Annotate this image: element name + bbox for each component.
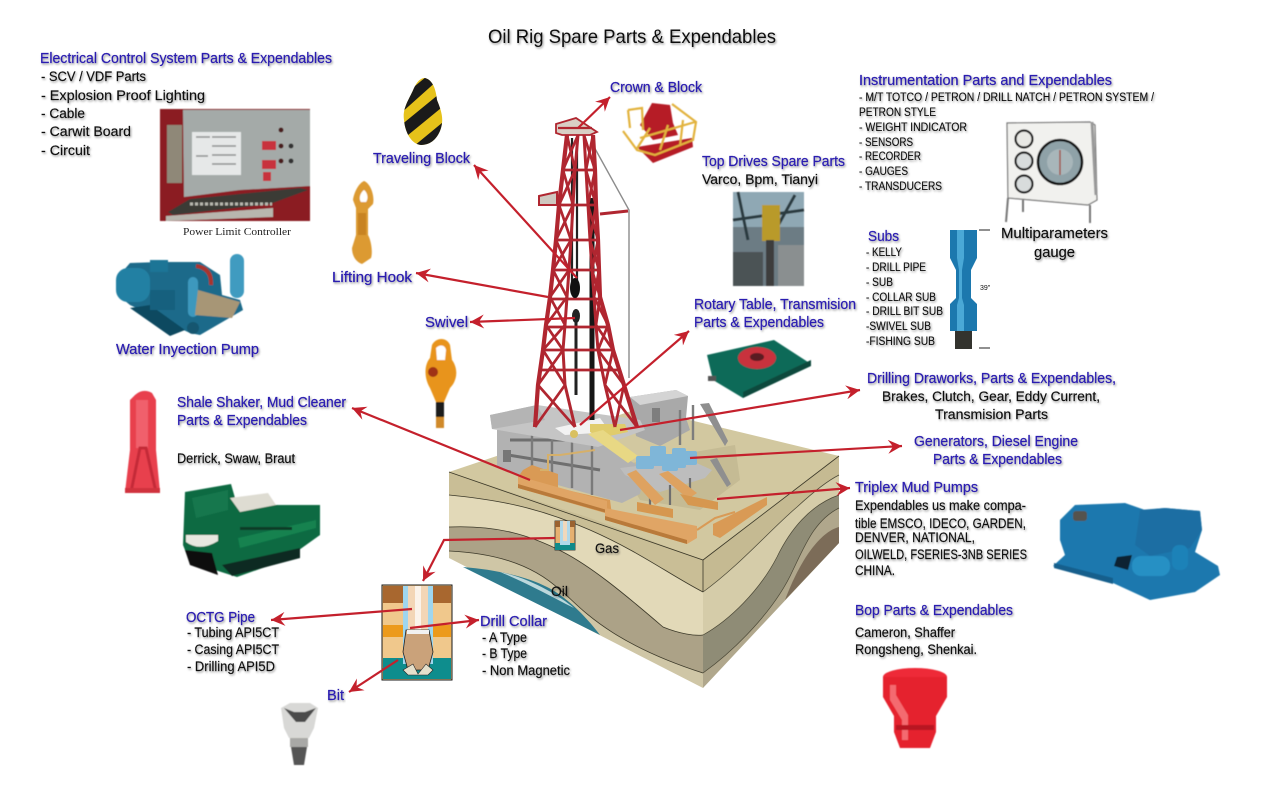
stairs xyxy=(597,403,731,487)
arrow: shale shaker xyxy=(352,408,530,480)
arrow: traveling block xyxy=(474,165,577,278)
crown cap xyxy=(556,118,597,135)
panel: electrical control system xyxy=(40,51,332,158)
list: subs: - DRILL BIT SUB xyxy=(866,306,943,318)
lower body xyxy=(497,425,645,503)
text: triplex details: DENVER, NATIONAL, xyxy=(855,530,975,545)
list: subs: -FISHING SUB xyxy=(866,336,935,348)
heading: rotary table: Parts & Expendables xyxy=(694,315,824,331)
label: lifting hook: Lifting Hook xyxy=(332,270,413,286)
upper house xyxy=(630,390,690,446)
image: crown block xyxy=(623,103,696,163)
image: top drive photo xyxy=(733,192,804,286)
list: octg: - Drilling API5D xyxy=(187,659,275,674)
traveling block in derrick xyxy=(570,278,580,298)
image: small drill inset xyxy=(555,521,575,550)
oil pocket xyxy=(463,567,600,635)
text: bop brands xyxy=(855,625,977,657)
lower deck xyxy=(620,460,712,492)
panel: shale shaker xyxy=(177,395,346,466)
list: drill collar: - Non Magnetic xyxy=(482,663,570,678)
list: subs: - KELLY xyxy=(866,247,902,259)
mud tanks xyxy=(518,450,767,544)
image: shaker machine xyxy=(183,484,320,577)
arrows xyxy=(271,97,902,692)
image: power limit controller xyxy=(160,109,310,221)
label: multiparameters gauge xyxy=(1001,226,1108,261)
arrow: rotary table xyxy=(580,331,689,425)
list: subs: - DRILL PIPE xyxy=(866,262,926,274)
list: drill collar xyxy=(482,630,570,678)
panel: bop xyxy=(855,603,1013,657)
text: bop brands: Rongsheng, Shenkai. xyxy=(855,642,977,657)
panel: rotary table xyxy=(694,297,856,331)
earth block xyxy=(449,408,839,688)
list: instrumentation: - GAUGES xyxy=(859,166,908,178)
gin pole line xyxy=(593,145,629,378)
image: bop xyxy=(883,668,947,748)
arrow: drawworks xyxy=(620,390,860,430)
heading: octg: OCTG Pipe xyxy=(186,610,255,626)
label: multiparameters gauge: gauge xyxy=(1034,245,1075,261)
drill pipes xyxy=(590,198,594,420)
right face layers xyxy=(703,456,839,592)
list: electrical parts: - SCV / VDF Parts xyxy=(41,69,146,84)
caption: power limit controller: Power Limit Controller xyxy=(183,226,291,238)
label: swivel: Swivel xyxy=(425,315,468,331)
list: electrical parts xyxy=(41,69,205,158)
heading: rotary table: Rotary Table, Transmision xyxy=(694,297,856,313)
list: instrumentation xyxy=(859,92,1155,193)
arrow: swivel xyxy=(470,318,575,322)
panel: instrumentation xyxy=(859,73,1155,193)
list: drill collar: - A Type xyxy=(482,630,527,645)
label: oil: Oil xyxy=(551,583,568,599)
image: water injection pump xyxy=(116,254,244,336)
drawworks yellow xyxy=(570,424,638,463)
image: drill bit xyxy=(281,703,318,765)
title: Oil Rig Spare Parts & Expendables xyxy=(488,26,776,48)
image: swivel xyxy=(426,339,456,428)
list: electrical parts: - Explosion Proof Lighting xyxy=(41,88,205,103)
label: crown and block: Crown & Block xyxy=(610,80,703,96)
list: electrical parts: - Cable xyxy=(41,106,85,121)
text: triplex details: tible EMSCO, IDECO, GARDEN, xyxy=(855,516,1026,531)
top surface xyxy=(449,408,839,560)
ground shadow xyxy=(620,445,740,510)
heading: shale shaker xyxy=(177,395,346,429)
text: top drive brands: Varco, Bpm, Tianyi xyxy=(702,172,818,187)
heading: triplex: Triplex Mud Pumps xyxy=(855,480,978,496)
arrow: drill collar xyxy=(410,620,479,628)
list: octg: - Tubing API5CT xyxy=(187,625,279,640)
text: triplex details xyxy=(855,498,1027,578)
image: blue sub pipe: 39" xyxy=(980,285,991,292)
arrow: triplex xyxy=(717,488,850,499)
text: triplex details: CHINA. xyxy=(855,563,895,578)
heading: rotary table xyxy=(694,297,856,331)
list: drill collar: - B Type xyxy=(482,646,527,661)
heading: shale shaker: Parts & Expendables xyxy=(177,413,307,429)
list: instrumentation: - RECORDER xyxy=(859,151,921,163)
arrow: inset to cross-section xyxy=(423,538,555,581)
heading: generators: Generators, Diesel Engine xyxy=(914,434,1078,450)
list: subs: - SUB xyxy=(866,277,893,289)
list: instrumentation: - WEIGHT INDICATOR xyxy=(859,122,967,134)
legs xyxy=(535,135,567,427)
panel: triplex mud pumps xyxy=(855,480,1027,578)
racking platform xyxy=(539,192,557,205)
list: subs: - COLLAR SUB xyxy=(866,292,936,304)
heading: drawworks: Drilling Draworks, Parts & Expendables, xyxy=(867,371,1116,387)
text: bop brands: Cameron, Shaffer xyxy=(855,625,955,640)
list: instrumentation: - TRANSDUCERS xyxy=(859,181,942,193)
heading: drill collar: Drill Collar xyxy=(480,614,547,630)
image: rotary table xyxy=(707,340,811,398)
list: octg: - Casing API5CT xyxy=(187,642,279,657)
label: multiparameters gauge: Multiparameters xyxy=(1001,226,1108,242)
arrow: bit xyxy=(349,660,398,692)
panel: drill collar xyxy=(480,614,570,678)
list: octg xyxy=(187,625,279,674)
text: drawworks parts xyxy=(882,389,1100,422)
generators xyxy=(636,446,697,471)
image: traveling block xyxy=(404,78,442,145)
list: instrumentation: - M/T TOTCO / PETRON / DRILL NATCH / PETRON SYSTEM / xyxy=(859,92,1155,104)
derrick xyxy=(535,118,637,427)
list: subs: -SWIVEL SUB xyxy=(866,321,931,333)
panel: drawworks xyxy=(867,371,1116,422)
arrow: octg xyxy=(271,609,412,620)
image: blue sub pipe xyxy=(950,230,991,349)
list: electrical parts: - Circuit xyxy=(41,143,90,158)
label: water injection pump: Water Inyection Pump xyxy=(116,342,259,358)
list: subs xyxy=(866,247,943,348)
heading: electrical: Electrical Control System Parts & Expendables xyxy=(40,51,332,67)
image: drilling cross-section xyxy=(382,585,452,680)
text: drawworks parts: Brakes, Clutch, Gear, Eddy Current, xyxy=(882,389,1100,404)
arrow: lifting hook xyxy=(416,273,548,297)
text: triplex details: Expendables us make compa- xyxy=(855,498,1026,513)
panel: subs xyxy=(866,229,943,348)
list: instrumentation: - SENSORS xyxy=(859,137,913,149)
text: shaker brands: Derrick, Swaw, Braut xyxy=(177,451,295,466)
image: red desander xyxy=(125,391,160,493)
image: gauge panel xyxy=(1006,122,1097,223)
heading: top drives: Top Drives Spare Parts xyxy=(702,154,845,170)
list: electrical parts: - Carwit Board xyxy=(41,124,131,139)
text: triplex details: OILWELD, FSERIES-3NB SERIES xyxy=(855,547,1027,562)
image: lifting hook xyxy=(352,181,373,264)
text: drawworks parts: Transmision Parts xyxy=(935,407,1048,422)
label: bit: Bit xyxy=(327,688,344,704)
hook in derrick xyxy=(572,309,580,323)
list: instrumentation: PETRON STYLE xyxy=(859,107,936,119)
label: gas: Gas xyxy=(595,540,619,556)
image: triplex pump xyxy=(1053,503,1220,600)
heading: instrumentation: Instrumentation Parts and Expendables xyxy=(859,73,1112,89)
rig floor and buildings xyxy=(490,390,740,510)
label: traveling block: Traveling Block xyxy=(373,151,471,167)
panel: octg pipe xyxy=(186,610,279,674)
heading: shale shaker: Shale Shaker, Mud Cleaner xyxy=(177,395,346,411)
heading: generators xyxy=(914,434,1078,468)
panel: top drives xyxy=(702,154,845,187)
heading: subs: Subs xyxy=(868,229,899,245)
deck xyxy=(490,405,645,447)
heading: generators: Parts & Expendables xyxy=(933,452,1062,468)
arrow: generators xyxy=(690,446,902,458)
heading: bop: Bop Parts & Expendables xyxy=(855,603,1013,619)
arrow: crown xyxy=(578,97,610,128)
lattice xyxy=(538,135,575,427)
